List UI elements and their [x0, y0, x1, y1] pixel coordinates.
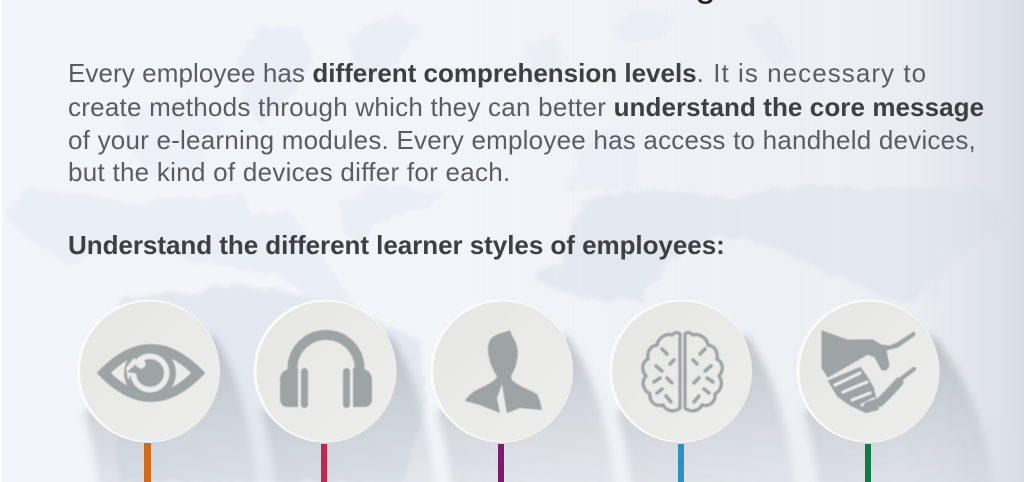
- icon: eye: [98, 345, 204, 401]
- intro paragraph: of your e-learning modules. Every employee has access to handheld devices,: [68, 125, 976, 155]
- intro paragraph: create methods through which they can better understand the core message: [68, 92, 984, 122]
- intro paragraph: but the kind of devices differ for each.: [68, 157, 510, 187]
- connector line green: [865, 444, 871, 482]
- intro paragraph: Every employee has different comprehension levels. It is necessary to: [68, 58, 927, 88]
- disc: [77, 300, 220, 442]
- disc: [254, 300, 396, 442]
- connector line crimson: [321, 444, 327, 482]
- learner style: visual: [77, 300, 220, 482]
- disc: [796, 300, 940, 442]
- intro paragraph: [68, 58, 984, 187]
- subheading: Understand the different learner styles of employees:: [68, 230, 725, 260]
- learner style: logical: [609, 300, 752, 482]
- icon: handshake: [822, 331, 915, 412]
- connector line blue: [678, 444, 684, 482]
- icon: brain: [643, 333, 722, 411]
- learner style: physical: [430, 300, 573, 482]
- learner style: social: [796, 300, 940, 482]
- icon: headphones: [280, 335, 372, 408]
- learner style: auditory: [254, 300, 396, 482]
- disc: [430, 300, 573, 442]
- long shadows: [84, 335, 994, 482]
- disc: [609, 300, 752, 442]
- connector line purple: [498, 444, 504, 482]
- icon: person bust: [465, 330, 542, 413]
- connector line orange: [144, 443, 151, 482]
